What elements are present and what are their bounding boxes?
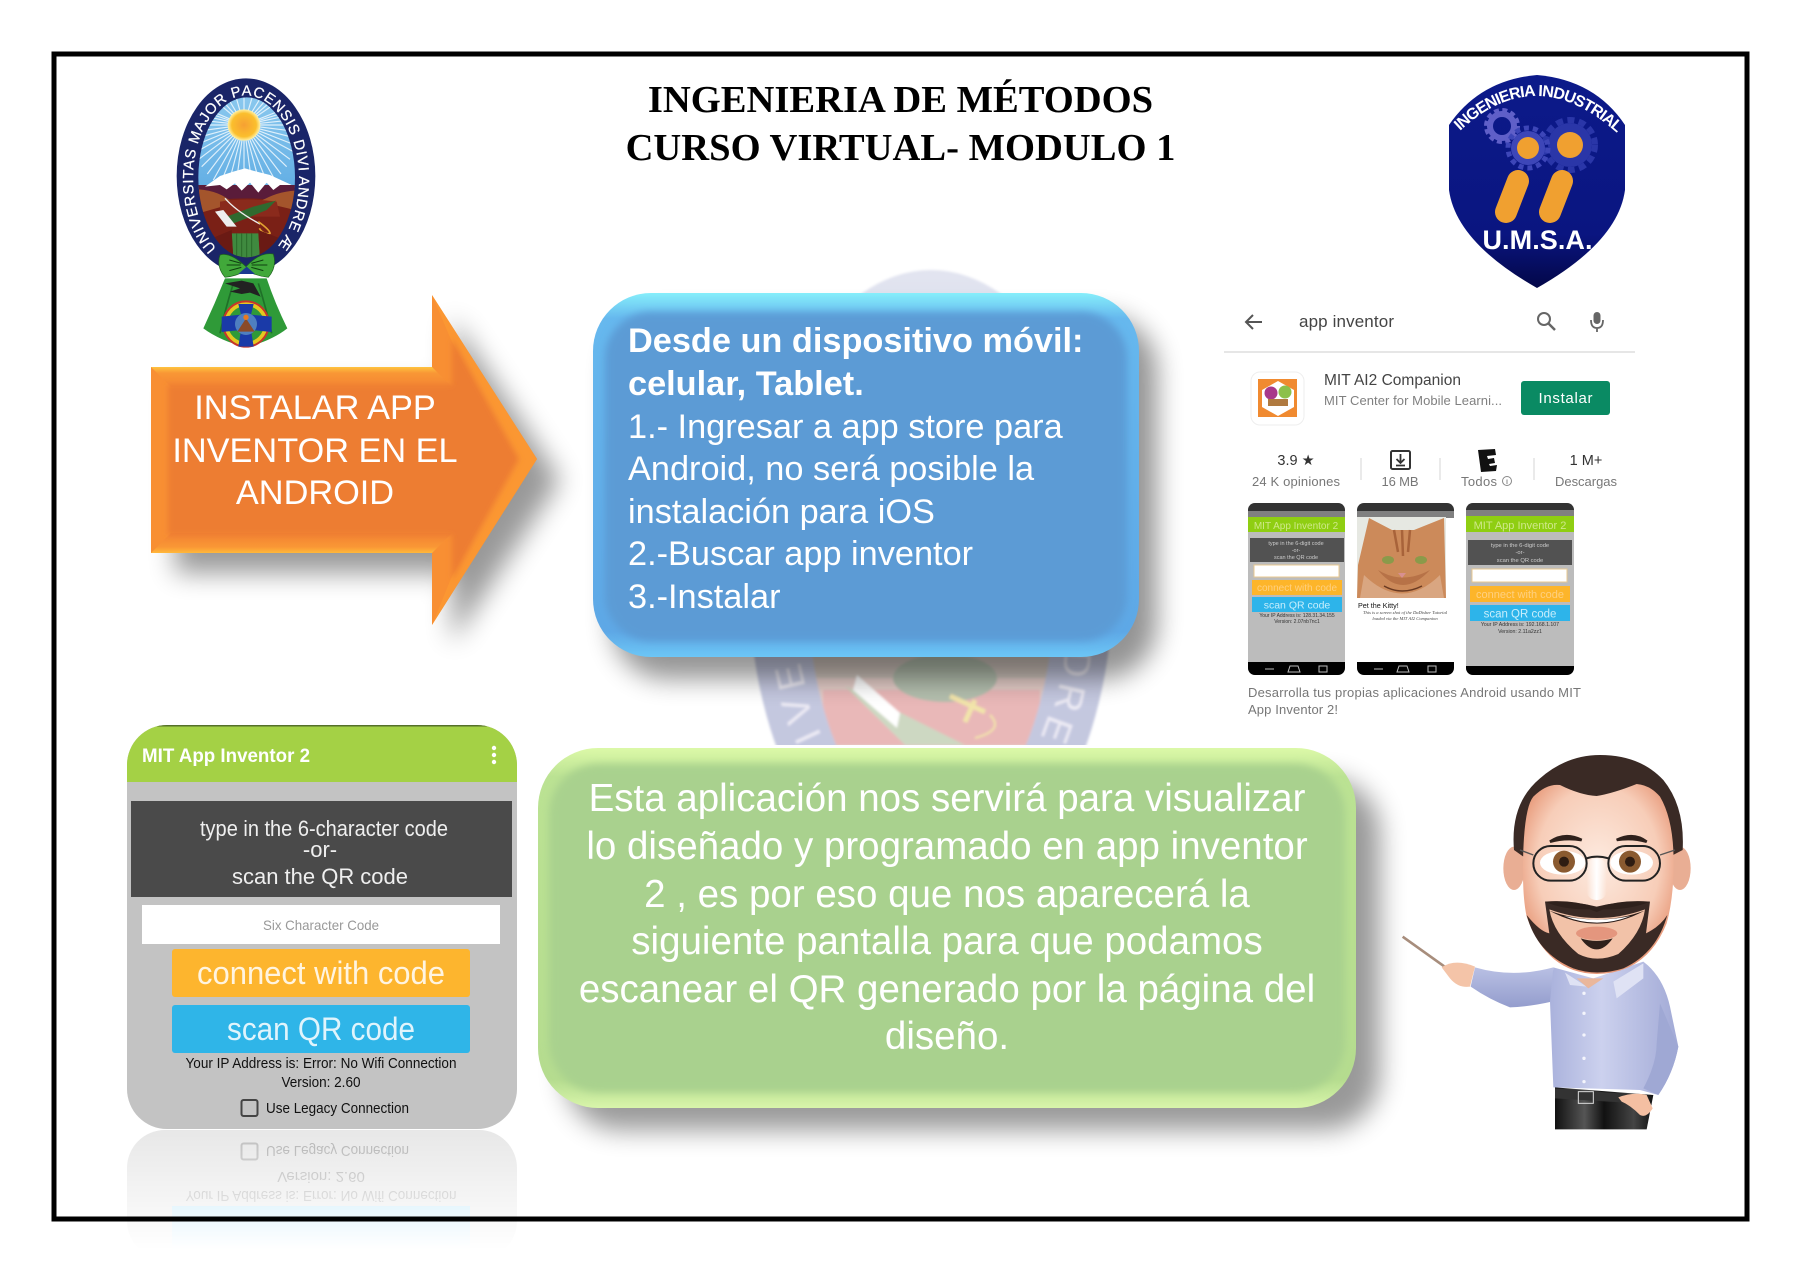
steps text: 3.-Instalar [628,578,780,616]
seal bow [219,254,275,277]
app name: MIT AI2 Companion [1324,372,1461,389]
watermark: university seal: E [1032,710,1080,748]
status lines: Your IP Address is: Error: No Wifi Connection [186,1055,456,1072]
screenshot 1: Your IP Address is: 128.31.34.155 [1259,613,1335,619]
search bar [1224,312,1635,352]
search bar: app inventor [1299,312,1394,331]
shirt and arm [1471,962,1678,1095]
install button: Instalar [1538,390,1592,407]
screenshot 3: -or- [1515,550,1525,556]
watermark: university seal: R [1045,679,1092,716]
screenshot 1: connect with code [1257,583,1337,594]
screenshot 1: Version: 2.07nb7nc1 [1274,619,1320,625]
rating stat: 24 K opiniones [1252,474,1340,489]
title: INGENIERIA DE MÉTODOS [648,79,1153,121]
instruction box: scan the QR code [232,864,408,889]
gears [1486,110,1595,170]
eyes [1540,851,1653,875]
explanation text: escanear el QR generado por la página del [579,968,1315,1011]
connect button: connect with code [197,955,445,991]
explanation text: diseño. [885,1015,1009,1058]
watermark: university seal: D [1054,648,1098,679]
connect button [172,949,470,997]
watermark: university seal: E [768,660,814,694]
explanation text: siguiente pantalla para que podamos [631,920,1263,963]
hands [1618,1094,1653,1116]
steps text: instalación para iOS [628,493,935,531]
head [1503,755,1691,974]
screenshot 3: scan QR code [1484,608,1556,620]
screenshot 3: connect with code [1476,589,1564,601]
steps text: 1.- Ingresar a app store para [628,408,1064,446]
steps text [628,322,1083,616]
explanation text: lo diseñado y programado en app inventor [586,825,1308,868]
age rating stat: Todos [1461,474,1498,489]
title [626,79,1175,169]
status lines [186,1055,456,1091]
watermark: university seal: V [774,691,822,729]
trousers and belt [1555,1087,1653,1129]
screenshot 3: MIT App Inventor 2 [1474,520,1566,532]
steps text: celular, Tablet. [628,365,864,403]
steps text: Android, no será posible la [628,450,1035,488]
phone screen reflection [127,1130,517,1235]
rating stat: 3.9 ★ [1277,453,1315,469]
steps text: Desde un dispositivo móvil: [628,322,1083,360]
size stat [1382,451,1418,489]
arrow label: INVENTOR EN EL [172,432,458,470]
explanation text [579,777,1315,1058]
status lines: Version: 2.60 [282,1074,360,1091]
rating stat [1252,453,1340,489]
screenshot 3: Your IP Address is: 192.168.1.107 [1481,622,1559,628]
screenshot 1: scan the QR code [1274,555,1318,561]
screenshot 2: This is a screen shot of the DaDisher Tutorial [1363,610,1448,615]
screenshot 3: type in the 6-digit code [1491,543,1549,549]
panel: Play Store listing: MIT Center for Mobile Learni... [1324,393,1502,408]
watermark: university seal: I [788,723,830,750]
screenshot 2 [1357,503,1454,675]
title: CURSO VIRTUAL- MODULO 1 [626,127,1175,169]
screenshot 2: Pet the Kitty! [1358,601,1399,610]
logo: Ingeniería Industrial shield [1449,75,1625,288]
seal oval [177,78,315,274]
caption: App Inventor 2! [1248,702,1338,717]
logo: Ingeniería Industrial shield: U.M.S.A. [1482,225,1592,255]
screenshot 3 [1466,503,1574,675]
glasses [1520,846,1675,881]
size stat: 16 MB [1382,474,1418,489]
phone screen reflection: Use Legacy Connection [266,1142,409,1159]
downloads stat: 1 M+ [1570,453,1602,469]
scan button: scan QR code [227,1011,415,1047]
arrow: install App Inventor on Android [151,295,560,643]
watermark: university seal [754,270,1110,745]
logo: UMSA university seal [176,78,316,348]
app icon [1251,372,1304,425]
instruction box [131,801,512,897]
downloads stat: Descargas [1555,474,1618,489]
app title bar text [142,745,496,767]
steps text: 2.-Buscar app inventor [628,535,973,573]
screenshot 2: loaded via the MIT AI2 Companion [1372,616,1438,621]
pointer stick [1403,937,1448,969]
cat photo [1357,517,1446,598]
screenshot 1: type in the 6-digit code [1268,541,1324,547]
panel: Play Store listing [1224,312,1635,717]
screenshot 1 [1248,503,1345,675]
arrow label: ANDROID [236,474,394,512]
panel: MIT App Inventor phone screen [127,725,517,1129]
install button [1521,381,1610,415]
panel: steps on mobile device [593,293,1157,679]
explanation text: 2 , es por eso que nos aparecerá la [644,873,1250,916]
phone screen reflection: Your IP Address is: Error: No Wifi Connection [186,1187,456,1204]
instruction box: type in the 6-character code [200,816,448,841]
explanation text: Esta aplicación nos servirá para visualizar [589,777,1306,820]
downloads stat [1555,453,1618,489]
caption [1248,685,1581,717]
screenshot 1: MIT App Inventor 2 [1254,521,1339,532]
code input [142,905,500,944]
panel: explanation [538,748,1380,1130]
scan button [172,1005,470,1053]
age rating stat [1461,449,1512,489]
seal medal [222,281,272,347]
instruction box: -or- [303,837,337,862]
phone screen reflection: Version: 2.60 [277,1168,365,1185]
screenshot 1: -or- [1292,548,1300,554]
screenshot 1: scan QR code [1264,600,1330,612]
arrow label: INSTALAR APP [194,389,436,427]
caption: Desarrolla tus propias aplicaciones Android usando MIT [1248,685,1581,700]
code input: Six Character Code [263,917,379,933]
app title bar text: MIT App Inventor 2 [142,745,310,767]
legacy checkbox: Use Legacy Connection [266,1100,409,1117]
arrow label [172,389,458,512]
seal ring text: UNIVERSITAS MAJOR PACENSIS DIVI ANDRE Æ [182,85,310,254]
logo: Ingeniería Industrial shield: INGENIERIA INDUSTRIAL [1453,85,1620,133]
seal drape [203,278,287,347]
screenshot 3: scan the QR code [1497,558,1543,564]
screenshot 3: Version: 2.11a2zz1 [1498,629,1542,635]
character: teacher with pointer [1403,755,1691,1129]
